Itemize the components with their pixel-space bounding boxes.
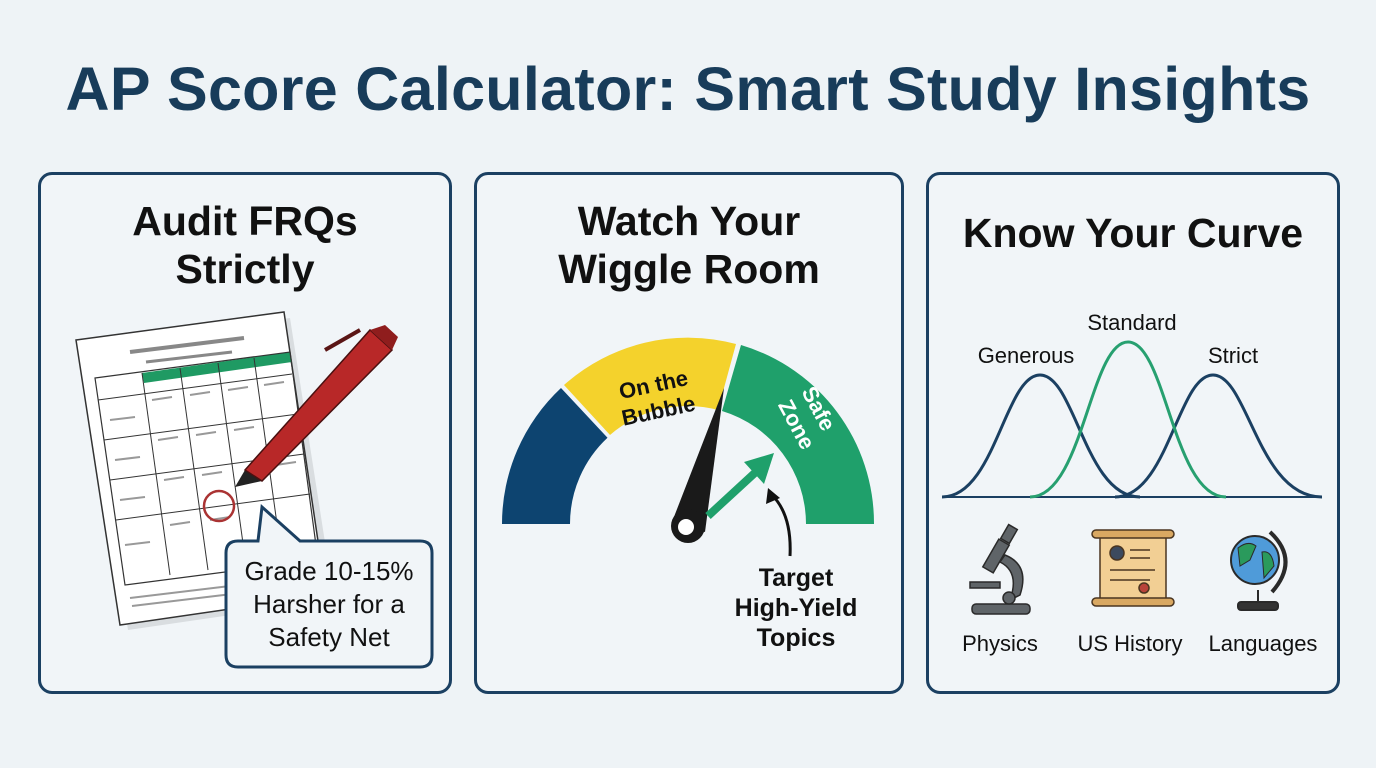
heading: wiggle: Watch Your (578, 198, 800, 244)
gauge: Bubble (619, 391, 698, 431)
icon: globe (1231, 532, 1286, 610)
labels: subjects: Physics (962, 631, 1038, 656)
title: AP Score Calculator: Smart Study Insights (65, 55, 1311, 123)
icon: microscope (970, 525, 1030, 614)
illustration: graded sheet (76, 312, 398, 630)
chart: curves: Standard (1087, 310, 1177, 335)
panel: audit FRQs (38, 172, 452, 694)
labels: subjects (962, 631, 1317, 656)
gauge: Safe (797, 382, 841, 435)
panel: curve (926, 172, 1340, 694)
chart: curves: Strict (1208, 343, 1258, 368)
heading: wiggle (558, 198, 820, 292)
callout: grade harsher: Harsher for a (253, 589, 405, 619)
panel: wiggle room (474, 172, 904, 694)
heading: audit: Audit FRQs (132, 198, 358, 244)
needle (671, 388, 724, 543)
labels: subjects: Languages (1209, 631, 1317, 656)
gauge (502, 338, 874, 524)
arrow: green up (708, 453, 774, 516)
label: target topics: Topics (757, 624, 835, 652)
arrow: black curved (766, 488, 790, 556)
heading: audit: Strictly (176, 246, 314, 292)
gauge: On the (617, 365, 690, 404)
chart: curves: Generous (978, 343, 1074, 368)
chart: curves (942, 310, 1322, 497)
heading: curve: Know Your Curve (963, 210, 1303, 256)
label: target topics: High-Yield (735, 594, 857, 622)
labels: subjects: US History (1077, 631, 1183, 656)
label: target topics (735, 564, 857, 652)
heading: audit (132, 198, 358, 292)
label: target topics: Target (759, 564, 834, 592)
callout: grade harsher: Grade 10-15% (244, 556, 414, 586)
heading: wiggle: Wiggle Room (558, 246, 820, 292)
callout: grade harsher: Safety Net (268, 622, 390, 652)
callout: grade harsher (226, 507, 432, 667)
gauge: Zone (773, 395, 820, 454)
icon: scroll (1092, 530, 1174, 606)
